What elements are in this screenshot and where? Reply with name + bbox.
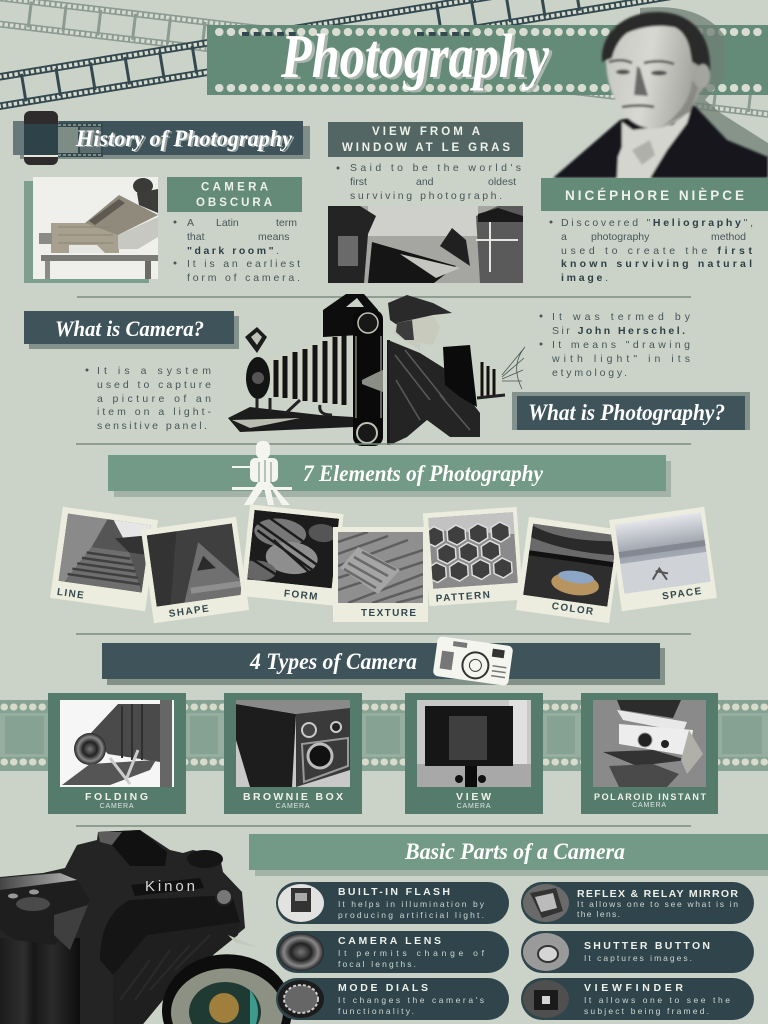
title: Photography: [280, 23, 549, 91]
photo: shape: [141, 517, 249, 623]
text: Nièpce bullets: photography: [591, 231, 650, 243]
heading: 4 Types of Camera: [102, 643, 665, 685]
image: camera obscura engraving: [24, 177, 158, 283]
text: Nièpce bullets: used to create the first: [561, 245, 752, 257]
photo: shape: SHAPE: [168, 603, 211, 620]
text: camera obscura bullets: Latin: [216, 217, 239, 229]
text: Nièpce bullets: method: [711, 231, 746, 243]
text: view from a window bullets: first: [350, 176, 367, 188]
divider: [76, 443, 691, 445]
card: Brownie box camera: BROWNIE BOX: [243, 791, 343, 803]
panel: camera obscura: [24, 177, 302, 284]
photo: form: FORM: [283, 588, 319, 603]
text: camera obscura bullets: that: [187, 231, 205, 243]
text: camera obscura bullets: form of camera.: [187, 272, 300, 284]
panel: basic parts of a camera: [249, 834, 768, 1020]
heading: Basic Parts of a Camera: Basic Parts of a Camera: [404, 839, 625, 864]
photo: pattern: [423, 507, 523, 606]
text: camera obscura bullets: "dark room".: [187, 245, 279, 257]
part: reflex and relay mirror: It allows one to see what is in: [577, 899, 738, 909]
heading: view from a window: VIEW FROM A: [372, 126, 480, 138]
text: what is photography bullets: It means "drawing: [552, 339, 690, 351]
heading: camera obscura: [167, 177, 302, 212]
text: what is photography bullets: Sir John Herschel.: [552, 325, 685, 337]
part: built-in flash: producing artificial light.: [338, 910, 484, 920]
text: what is photography bullets: etymology.: [552, 367, 627, 379]
card: folding camera: [48, 693, 186, 814]
panel: Nicéphore Nièpce: [541, 178, 768, 284]
illustration: vintage folding camera and photographer: [228, 294, 525, 446]
heading: view from a window: [328, 122, 523, 157]
heading: camera obscura: CAMERA: [201, 182, 268, 194]
panel: 4 types of camera: [0, 636, 768, 814]
text: what is camera bullet: sensitive panel.: [97, 420, 207, 432]
part: mode dials: [276, 978, 509, 1020]
panel: view from a window at Le Gras: [328, 122, 523, 283]
part: shutter button: [521, 931, 754, 973]
photo: space: SPACE: [662, 586, 703, 602]
part: camera lens: CAMERA LENS: [338, 935, 441, 947]
photo: color: COLOR: [551, 601, 595, 618]
text: camera obscura bullets: means: [258, 231, 290, 243]
text: Nièpce bullets: image .: [561, 272, 608, 284]
photo: color: [516, 517, 622, 623]
part: mode dials: It changes the camera's: [338, 995, 484, 1005]
text: what is photography bullets: [540, 311, 691, 379]
photo: texture: [333, 527, 428, 622]
image: first photograph: [328, 206, 523, 283]
heading: History of Photography: History of Photography: [77, 127, 295, 152]
illustration: black DSLR camera with lens: Kinon: [145, 878, 195, 895]
divider: [76, 633, 691, 635]
part: built-in flash: [276, 882, 509, 924]
part: mode dials: MODE DIALS: [338, 982, 428, 994]
heading: History of Photography: [13, 111, 310, 165]
photo: texture: TEXTURE: [361, 608, 417, 619]
card: folding camera: CAMERA: [100, 803, 134, 810]
photo: line: LINE: [56, 587, 86, 602]
divider: [77, 296, 691, 298]
text: what is camera bullet: a picture of an: [97, 393, 211, 405]
photo: line: [50, 507, 158, 611]
text: what is camera bullet: used to capture: [97, 379, 211, 391]
part: viewfinder: VIEWFINDER: [584, 982, 683, 994]
part: viewfinder: subject being framed.: [584, 1006, 709, 1016]
heading: What is Camera?: What is Camera?: [55, 316, 204, 341]
heading: Nicéphore Nièpce: NICÉPHORE NIÈPCE: [565, 188, 744, 203]
text: Nièpce bullets: Discovered " Heliography ",: [561, 217, 753, 229]
part: camera lens: It permits change of: [338, 948, 485, 958]
part: reflex and relay mirror: REFLEX & RELAY MIRROR: [577, 888, 738, 900]
card: Polaroid instant camera: POLAROID INSTANT: [594, 792, 706, 802]
text: view from a window bullets: [336, 162, 521, 202]
text: what is camera bullet: item on a light-: [97, 406, 212, 418]
text: what is photography bullets: with light" in its: [551, 353, 690, 365]
part: shutter button: It captures images.: [584, 953, 692, 963]
card: view camera: [405, 693, 543, 814]
card: Brownie box camera: CAMERA: [276, 803, 310, 810]
part: reflex and relay mirror: [521, 882, 754, 924]
film strip band: [0, 700, 768, 771]
card: Brownie box camera: [224, 693, 362, 814]
portrait: Nicéphore Nièpce: [553, 7, 768, 178]
title: Photography: [283, 25, 552, 93]
heading: What is Camera?: [24, 311, 239, 349]
text: camera obscura bullets: [174, 217, 300, 284]
text: camera obscura bullets: It is an earliest: [187, 258, 300, 270]
photo: form: [237, 504, 344, 606]
heading: What is Photography?: What is Photography?: [528, 400, 725, 425]
part: shutter button: SHUTTER BUTTON: [584, 940, 710, 952]
part: camera lens: focal lengths.: [338, 959, 416, 969]
panel: 7 elements of photography: [50, 441, 717, 623]
card: Polaroid instant camera: [581, 693, 718, 814]
part: viewfinder: [521, 978, 754, 1020]
panel: what is camera: [24, 311, 239, 432]
heading: Nicéphore Nièpce: [541, 178, 768, 211]
text: view from a window bullets: oldest: [488, 176, 516, 188]
icon: movie camera on tripod: [232, 441, 292, 505]
part: built-in flash: BUILT-IN FLASH: [338, 886, 450, 898]
card: folding camera: FOLDING: [85, 791, 148, 803]
part: mode dials: functionality.: [338, 1006, 414, 1016]
film strip: dark, crossing the header: [0, 0, 683, 107]
heading: view from a window: WINDOW AT LE GRAS: [342, 142, 510, 154]
illustration: black DSLR camera with lens: [0, 830, 292, 1024]
text: what is camera bullet: [86, 365, 212, 432]
part: built-in flash: It helps in illumination by: [338, 899, 485, 909]
panel: what is photography: [512, 311, 750, 430]
icon: film canister: [24, 111, 103, 165]
part: reflex and relay mirror: the lens.: [577, 909, 620, 919]
card: view camera: VIEW: [456, 791, 491, 803]
heading: Basic Parts of a Camera: [249, 834, 768, 876]
text: what is photography bullets: It was termed by: [552, 311, 691, 323]
heading: What is Photography?: [512, 392, 750, 430]
part: viewfinder: It allows one to see the: [584, 995, 730, 1005]
text: camera obscura bullets: term: [276, 217, 297, 229]
film strip: light, top left: [0, 0, 768, 114]
heading: 4 Types of Camera: 4 Types of Camera: [249, 649, 417, 674]
heading: 7 Elements of Photography: 7 Elements of Photography: [303, 461, 544, 486]
text: view from a window bullets: and: [416, 176, 434, 188]
divider: [76, 825, 691, 827]
text: Nièpce bullets: [550, 217, 753, 284]
text: view from a window bullets: Said to be the world's: [350, 162, 521, 174]
text: what is camera bullet: It is a system: [97, 365, 211, 377]
photo: space: [609, 507, 717, 611]
heading: History of Photography: History of Photography: [75, 126, 293, 151]
heading: 7 Elements of Photography: [108, 455, 671, 497]
text: Nièpce bullets: a: [561, 231, 567, 243]
card: view camera: CAMERA: [457, 803, 491, 810]
card: Polaroid instant camera: CAMERA: [632, 802, 667, 809]
title banner: [207, 25, 768, 95]
photo: pattern: PATTERN: [435, 590, 492, 605]
part: camera lens: [276, 931, 509, 973]
text: camera obscura bullets: A: [187, 217, 194, 229]
icon: white compact camera: [433, 636, 513, 686]
text: view from a window bullets: surviving photograph.: [350, 190, 502, 202]
text: Nièpce bullets: known surviving natural: [561, 258, 752, 270]
heading: camera obscura: OBSCURA: [196, 197, 272, 209]
